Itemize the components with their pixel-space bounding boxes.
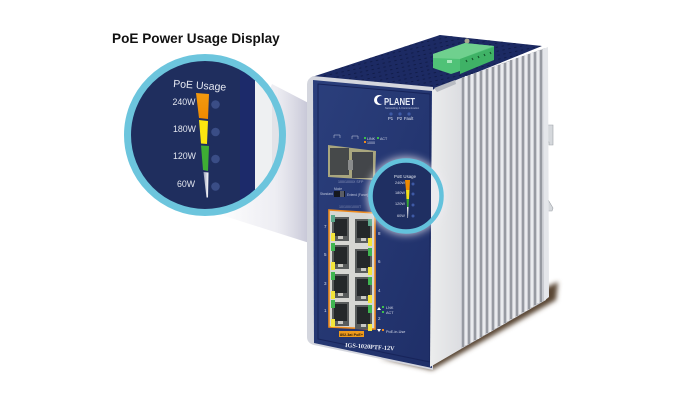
heat sink fins	[461, 47, 549, 349]
mode switch: Extend (Force)	[347, 193, 368, 197]
port numbers: 1	[324, 308, 327, 313]
small PoE usage meter: 120W	[395, 202, 405, 206]
front panel	[313, 80, 432, 368]
small PoE usage meter: 180W	[395, 191, 405, 195]
RJ45 port block	[329, 205, 375, 331]
labels: 180W	[173, 124, 197, 134]
port numbers: 5	[324, 252, 327, 257]
link/act legend: LINK	[367, 137, 376, 141]
SFP ports: 100/1000X SFP	[338, 180, 364, 184]
link/act legend	[334, 135, 388, 145]
PLANET logo: Networking & Communication	[385, 106, 420, 110]
port numbers: 8	[378, 231, 381, 236]
heading: PoE Usage	[173, 78, 227, 94]
panel edge strips	[240, 70, 279, 200]
labels	[172, 97, 197, 189]
labels: 60W	[177, 179, 196, 189]
port legend: LNK	[386, 306, 394, 310]
model name: IGS-1020PTF-12V	[345, 342, 395, 352]
PLANET logo: PLANET	[384, 96, 415, 108]
labels: 120W	[173, 151, 197, 161]
port numbers: 7	[324, 224, 327, 229]
port legend: PoE-in-Use	[386, 330, 405, 334]
port legend: ACT	[386, 311, 394, 315]
left silver frame	[307, 76, 433, 370]
port legend	[377, 306, 405, 334]
ring	[128, 58, 282, 212]
ports	[332, 217, 349, 241]
magnified circle	[127, 50, 290, 220]
port LEDs	[331, 215, 372, 331]
labels: 240W	[172, 97, 196, 107]
mode switch: Standard	[320, 192, 333, 196]
status LEDs: P1 P2 Fault: P1	[388, 116, 394, 121]
PLANET logo	[374, 95, 420, 110]
device: PoE switch	[307, 35, 553, 370]
DIN rail clips	[547, 125, 553, 211]
PoE label: 802.3at PoE+	[340, 332, 364, 337]
RJ45 port block: 10/100/1000T	[339, 205, 362, 209]
title: PoE Power Usage Display	[112, 31, 280, 46]
link/act legend: 1000	[367, 141, 375, 145]
port numbers: 6	[378, 259, 381, 264]
top face	[312, 35, 542, 90]
small PoE usage meter: 240W	[395, 181, 405, 185]
status LEDs: P1 P2 Fault: P2	[397, 116, 403, 121]
indicator dots	[211, 100, 220, 191]
side white strip	[430, 78, 461, 367]
circle base	[127, 57, 283, 213]
port numbers: 4	[378, 288, 381, 293]
small PoE usage meter: PoE Usage	[394, 174, 416, 179]
status LEDs: P1 P2 Fault: Fault	[404, 116, 414, 121]
mode switch	[320, 187, 368, 197]
status LEDs: P1 P2 Fault	[388, 112, 414, 121]
mode switch: Mode	[334, 187, 342, 191]
terminal block connector	[433, 38, 494, 74]
port numbers: 2	[378, 316, 381, 321]
link/act legend: ACT	[380, 137, 388, 141]
magnification cone	[218, 84, 322, 247]
small PoE usage meter	[394, 174, 416, 218]
device: floor shadow	[380, 282, 558, 370]
SFP ports	[328, 145, 376, 184]
small highlight circle	[367, 157, 451, 235]
port numbers	[324, 224, 381, 321]
small PoE usage meter: 60W	[397, 214, 405, 218]
meter	[196, 93, 209, 198]
port numbers: 3	[324, 281, 327, 286]
